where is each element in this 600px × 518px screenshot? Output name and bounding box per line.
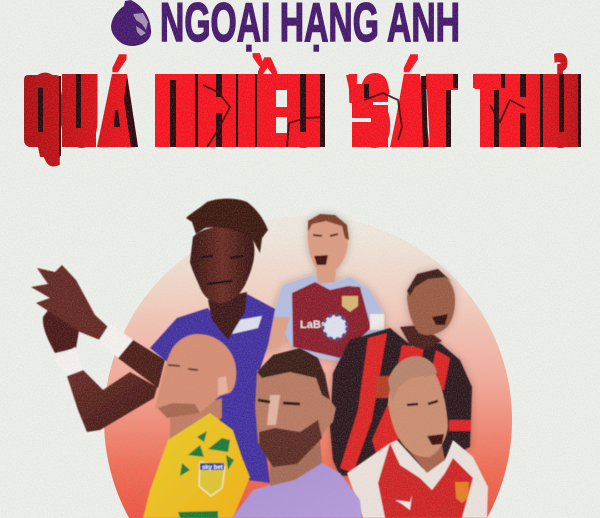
red stripes: [340, 333, 387, 473]
sleeve patch: [370, 314, 384, 330]
head: [255, 370, 336, 467]
hair: [257, 348, 330, 400]
player: Burnley forward: [255, 214, 384, 362]
neck: [400, 325, 442, 350]
club crest: [455, 482, 469, 503]
red shirt front: [378, 443, 473, 518]
player: Norwich forward: [143, 334, 250, 518]
wristband right: [99, 323, 133, 358]
player: Manchester City forward: [232, 348, 362, 518]
neck: [170, 398, 222, 445]
wristband left: [55, 347, 83, 376]
blue shirt: [150, 294, 275, 483]
white shirt: [347, 440, 488, 518]
player: Bournemouth forward: [330, 269, 472, 476]
club crest: [342, 296, 358, 312]
head: [155, 334, 236, 418]
sleeve trim: [449, 420, 471, 431]
fist: [255, 317, 290, 351]
neck: [400, 435, 445, 473]
yellow shirt: [143, 413, 250, 518]
black shirt base: [330, 328, 472, 476]
neck: [270, 440, 322, 486]
hair: [186, 199, 268, 253]
front hand with fingers: [31, 265, 108, 340]
left arm: [67, 370, 157, 432]
main title: QUÁ: [26, 55, 135, 167]
puma logo: [395, 495, 412, 510]
head: [388, 373, 448, 457]
red gradient disc: [104, 216, 512, 518]
head: [190, 227, 254, 303]
sky bet sleeve badge: sky bet: [202, 465, 223, 471]
player: Chelsea forward: [31, 199, 275, 483]
lilac shirt: [232, 462, 362, 518]
back hand: [43, 305, 80, 353]
main title: [24, 55, 581, 167]
eyes: [407, 401, 438, 405]
beard: [259, 420, 322, 467]
sponsor patch: [376, 376, 391, 398]
player: Arsenal forward: [347, 356, 488, 518]
league logo: lion head: [111, 0, 151, 46]
green shirt pattern: [178, 431, 234, 518]
sky bet sleeve badge: [199, 462, 225, 496]
mouth: [432, 314, 448, 325]
Burnley maroon front: [292, 282, 371, 358]
eyes and mouth: [201, 256, 243, 284]
hair: [388, 356, 437, 402]
hair: [407, 269, 452, 296]
mouth: [427, 434, 444, 445]
nose highlight: [267, 395, 280, 425]
Burnley shirt: [273, 275, 384, 362]
sponsor chip: [323, 315, 347, 339]
sponsor text: LaBa: [300, 319, 328, 331]
main title: NHIỀU: [157, 55, 323, 167]
head: [407, 273, 455, 335]
main title: 'SÁT: [347, 55, 456, 167]
eyes: [258, 400, 300, 404]
neck: [208, 292, 247, 340]
Burnley head: [308, 216, 348, 284]
right arm: [118, 340, 165, 388]
